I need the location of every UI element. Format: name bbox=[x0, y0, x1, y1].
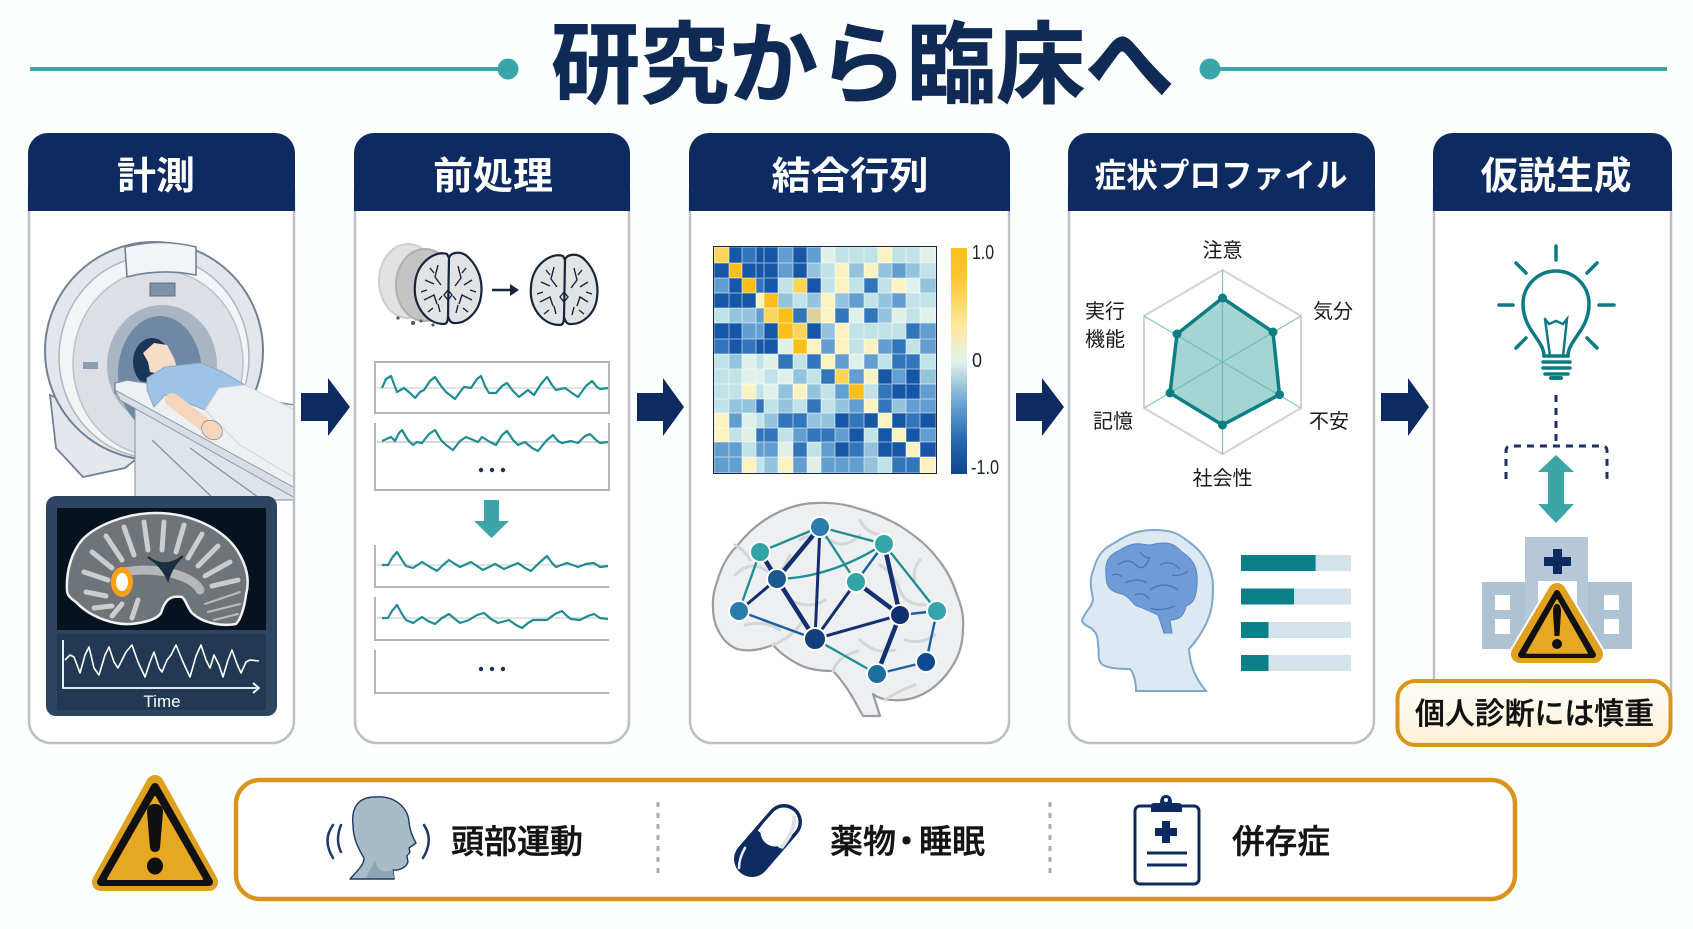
icon: clipboard bbox=[1135, 795, 1199, 884]
label: medication and sleep: 薬物 bbox=[830, 823, 896, 860]
header: 前処理 bbox=[433, 156, 553, 198]
header bbox=[28, 133, 295, 211]
MRI scanner illustration bbox=[45, 242, 300, 500]
brain outline bbox=[713, 503, 963, 716]
arrow: registration bbox=[492, 284, 519, 296]
colour scale: 0 bbox=[972, 350, 982, 372]
colour scale bbox=[951, 242, 999, 479]
radar chart bbox=[1085, 239, 1353, 490]
panel: 前処理 bbox=[354, 133, 630, 743]
confound box bbox=[236, 780, 1515, 899]
panel: confounds bbox=[236, 780, 1515, 899]
symptom bars bbox=[1241, 555, 1351, 671]
icon: warning small bbox=[1520, 592, 1594, 655]
brain network bbox=[713, 503, 963, 716]
label: comorbidity: 併存症 bbox=[1232, 823, 1330, 860]
title text: 研究から臨床へ bbox=[551, 15, 1174, 115]
radar labels: 機能 bbox=[1085, 328, 1125, 351]
aligned brain bbox=[531, 255, 598, 325]
header: 仮説生成 bbox=[1480, 156, 1632, 198]
panel: 仮説生成 bbox=[1398, 133, 1672, 745]
cleaned signals bbox=[375, 545, 609, 693]
title rule left bbox=[30, 58, 518, 80]
icon: capsule bbox=[739, 816, 794, 868]
title rule right bbox=[1200, 58, 1667, 80]
header: 計測 bbox=[117, 156, 195, 198]
icon: hospital bbox=[1482, 537, 1632, 649]
signal plot bbox=[63, 640, 259, 693]
panel: 症状プロファイル bbox=[1068, 133, 1375, 743]
arrow: step 4 to 5 bbox=[1381, 378, 1429, 436]
Time label: Time bbox=[143, 692, 181, 711]
activation spot bbox=[111, 567, 133, 597]
brain slice bbox=[57, 508, 266, 630]
network edges bbox=[739, 527, 937, 674]
header: 症状プロファイル bbox=[1094, 157, 1348, 194]
icon: light bulb bbox=[1499, 246, 1614, 378]
ellipsis bbox=[479, 667, 505, 671]
header bbox=[1433, 133, 1672, 211]
ellipsis bbox=[479, 468, 505, 472]
radar labels: 記憶 bbox=[1093, 410, 1133, 433]
radar labels: 社会性 bbox=[1192, 467, 1252, 490]
panel body bbox=[1069, 170, 1374, 743]
misaligned brain bbox=[379, 244, 482, 326]
header bbox=[689, 133, 1010, 211]
radar labels: 注意 bbox=[1202, 239, 1242, 262]
arrow: two-way bbox=[1538, 455, 1574, 523]
network nodes bbox=[729, 517, 947, 684]
colour scale: -1.0 bbox=[971, 457, 999, 479]
icon: warning large bbox=[101, 784, 209, 882]
radar labels: 不安 bbox=[1309, 410, 1349, 433]
arrow: step 3 to 4 bbox=[1016, 378, 1064, 436]
heatmap: connectivity matrix bbox=[713, 246, 937, 474]
arrow: step 2 to 3 bbox=[637, 378, 684, 436]
label: medication and sleep: 睡眠 bbox=[919, 823, 985, 860]
radar labels: 実行 bbox=[1085, 300, 1125, 323]
dashed connector bbox=[1506, 395, 1607, 479]
header: 結合行列 bbox=[772, 156, 928, 198]
label: head motion: 頭部運動 bbox=[451, 823, 583, 860]
callout: 個人診断には慎重 bbox=[1415, 698, 1654, 731]
arrow: step 1 to 2 bbox=[301, 378, 350, 436]
panel body bbox=[355, 170, 629, 743]
icon: head motion bbox=[328, 797, 429, 879]
panel body bbox=[690, 170, 1009, 743]
label: medication and sleep: ・ bbox=[890, 823, 923, 860]
title bbox=[30, 15, 1667, 115]
raw signals bbox=[375, 362, 609, 490]
panel: 計測 bbox=[28, 133, 300, 743]
header bbox=[354, 133, 630, 211]
radar labels bbox=[1085, 239, 1353, 490]
colour scale: 1.0 bbox=[972, 242, 994, 264]
radar labels: 気分 bbox=[1313, 300, 1353, 323]
panel body bbox=[29, 170, 294, 743]
panel: 結合行列 bbox=[689, 133, 1010, 743]
head with brain bbox=[1082, 530, 1213, 691]
fMRI card bbox=[46, 496, 277, 716]
header bbox=[1068, 133, 1375, 211]
panel body bbox=[1434, 170, 1671, 743]
callout bbox=[1398, 681, 1670, 745]
arrow: down bbox=[474, 500, 509, 538]
